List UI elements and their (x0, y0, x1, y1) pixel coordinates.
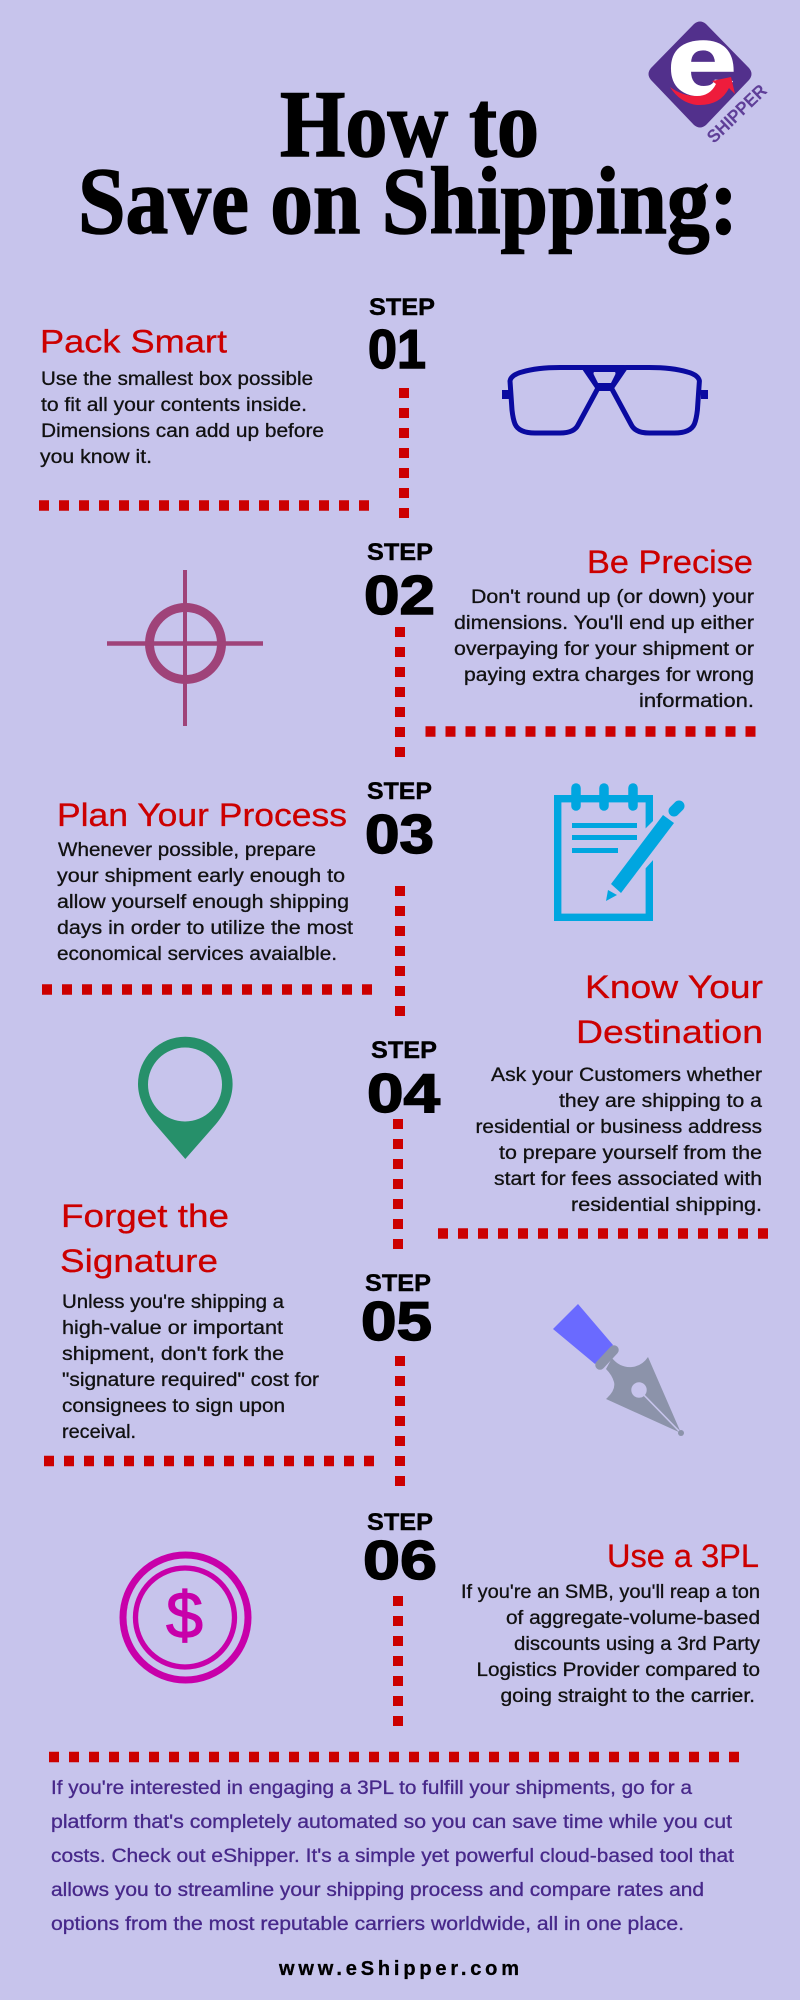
panel: step 03 plan your process (42, 778, 679, 1016)
body text: forget the signature: receival. (62, 1422, 136, 1443)
closing paragraph: platform that's completely automated so you can save time while you cut (51, 1812, 733, 1833)
body text: forget the signature: "signature required" cost for (62, 1370, 320, 1391)
step label 01: STEP (369, 294, 435, 321)
body text: be precise: paying extra charges for wrong (464, 665, 754, 686)
body text: know your destination: they are shipping to a (559, 1091, 762, 1112)
icon: fountain pen (553, 1304, 684, 1436)
step label 02: STEP (367, 539, 433, 566)
heading: know your destination: Know Your (585, 969, 763, 1005)
step label 02 (364, 539, 435, 626)
icon: glasses (502, 365, 708, 433)
logo letter e: e (667, 5, 737, 117)
step label 05: STEP (365, 1270, 431, 1297)
body text: be precise: Don't round up (or down) your (471, 587, 755, 608)
step label 06 (363, 1509, 437, 1591)
heading: forget the signature: Forget the (61, 1198, 229, 1234)
heading: use a 3pl: Use a 3PL (607, 1538, 759, 1574)
body text: be precise: information. (639, 691, 754, 712)
icon: crosshair target (107, 570, 263, 726)
closing paragraph: allows you to streamline your shipping process and compare rates and (51, 1880, 704, 1901)
title: How to (280, 71, 539, 177)
logo swoosh arrow (670, 77, 735, 105)
heading: be precise: Be Precise (587, 544, 753, 580)
step label 04: 04 (367, 1062, 440, 1124)
heading: plan your process: Plan Your Process (57, 797, 347, 833)
icon: notepad and pencil (558, 788, 679, 917)
body text: know your destination: Ask your Customers whether (491, 1065, 763, 1086)
body text: use a 3pl: discounts using a 3rd Party (514, 1634, 761, 1655)
body text: know your destination: residential or business address (476, 1117, 762, 1138)
body text: know your destination: start for fees associated with (494, 1169, 762, 1190)
body text: be precise: dimensions. You'll end up either (454, 613, 755, 634)
body text: pack smart: to fit all your contents inside. (41, 395, 307, 416)
step label 01 (368, 294, 435, 380)
step label 04 (367, 1037, 440, 1124)
body text: plan your process: Whenever possible, prepare (58, 840, 316, 861)
body text: pack smart: Use the smallest box possible (41, 369, 313, 390)
body text: plan your process: allow yourself enough shipping (57, 892, 349, 913)
closing paragraph (51, 1778, 735, 1935)
body text: pack smart: you know it. (40, 447, 152, 468)
heading: forget the signature: Signature (60, 1243, 218, 1279)
body text: be precise (454, 587, 755, 712)
icon: map pin (138, 1037, 233, 1159)
body text: forget the signature: consignees to sign upon (62, 1396, 285, 1417)
step label 05: 05 (361, 1290, 432, 1352)
step label 06: STEP (367, 1509, 433, 1536)
body text: pack smart: Dimensions can add up before (41, 421, 324, 442)
body text: use a 3pl: of aggregate-volume-based (506, 1608, 760, 1629)
closing paragraph: costs. Check out eShipper. It's a simple yet powerful cloud-based tool that (51, 1846, 735, 1867)
step label 03: 03 (365, 803, 434, 865)
heading: know your destination (576, 969, 763, 1050)
website url: www.eShipper.com (278, 1958, 519, 1980)
body text: plan your process: economical services avaialble. (57, 944, 337, 965)
body text: know your destination: to prepare yourself from the (499, 1143, 762, 1164)
panel: step 06 use a 3pl (123, 1509, 761, 1726)
body text: plan your process (57, 840, 354, 965)
body text: be precise: overpaying for your shipment or (454, 639, 755, 660)
body text: forget the signature: shipment, don't fork the (62, 1344, 284, 1365)
step label 03: STEP (367, 778, 432, 805)
body text: know your destination: residential shipping. (571, 1195, 762, 1216)
body text: pack smart (40, 369, 324, 468)
body text: forget the signature (62, 1292, 320, 1443)
body text: know your destination (476, 1065, 763, 1216)
body text: forget the signature: Unless you're shipping a (62, 1292, 284, 1313)
panel: step 02 be precise (107, 539, 756, 757)
icon: dollar coin: $ (166, 1578, 203, 1652)
closing paragraph: options from the most reputable carriers worldwide, all in one place. (51, 1914, 684, 1935)
title (78, 71, 738, 254)
body text: use a 3pl (461, 1582, 761, 1707)
body text: plan your process: your shipment early enough to (57, 866, 345, 887)
heading: forget the signature (60, 1198, 229, 1279)
step label 05 (361, 1270, 432, 1352)
panel: step 04 know your destination (138, 969, 768, 1249)
heading: pack smart: Pack Smart (40, 324, 227, 360)
body text: use a 3pl: Logistics Provider compared to (476, 1660, 760, 1681)
body text: use a 3pl: If you're an SMB, you'll reap a ton (461, 1582, 760, 1603)
title: Save on Shipping: (78, 148, 738, 254)
logo diamond (648, 22, 752, 128)
step label 04: STEP (371, 1037, 437, 1064)
body text: use a 3pl: going straight to the carrier. (500, 1686, 755, 1707)
logo wordmark: SHIPPER (703, 80, 771, 147)
step label 02: 02 (364, 564, 435, 626)
body text: plan your process: days in order to utilize the most (57, 918, 354, 939)
heading: know your destination: Destination (576, 1014, 763, 1050)
closing paragraph: If you're interested in engaging a 3PL to fulfill your shipments, go for a (51, 1778, 692, 1799)
step label 03 (365, 778, 434, 865)
step label 06: 06 (363, 1529, 437, 1591)
step label 01: 01 (368, 318, 426, 380)
logo: eShipper (648, 5, 771, 147)
panel: step 05 forget the signature (44, 1198, 684, 1486)
icon: dollar coin (123, 1555, 248, 1680)
panel: step 01 pack smart (39, 294, 708, 518)
body text: forget the signature: high-value or important (62, 1318, 284, 1339)
